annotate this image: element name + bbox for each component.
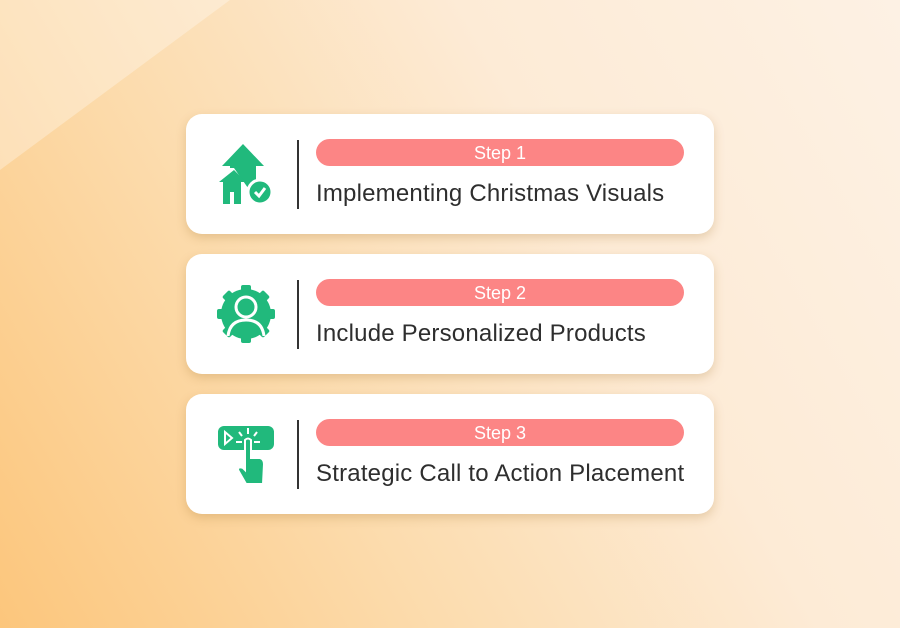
text: Include Personalized Products (316, 320, 646, 347)
icon: gear person (217, 285, 275, 343)
pill: step 2 (316, 279, 684, 306)
card: step 1 (186, 114, 714, 234)
pill: step 3: Step 3 (474, 423, 526, 443)
card: step 2 (186, 254, 714, 374)
icon: click button (218, 426, 274, 483)
pill: step 1: Step 1 (474, 143, 526, 163)
card: step 3 (186, 394, 714, 514)
text: Strategic Call to Action Placement (316, 460, 684, 487)
text: Implementing Christmas Visuals (316, 180, 664, 207)
pill: step 3 (316, 419, 684, 446)
pill: step 1 (316, 139, 684, 166)
pill: step 2: Step 2 (474, 283, 526, 303)
icon: arrows up with check (219, 144, 270, 204)
